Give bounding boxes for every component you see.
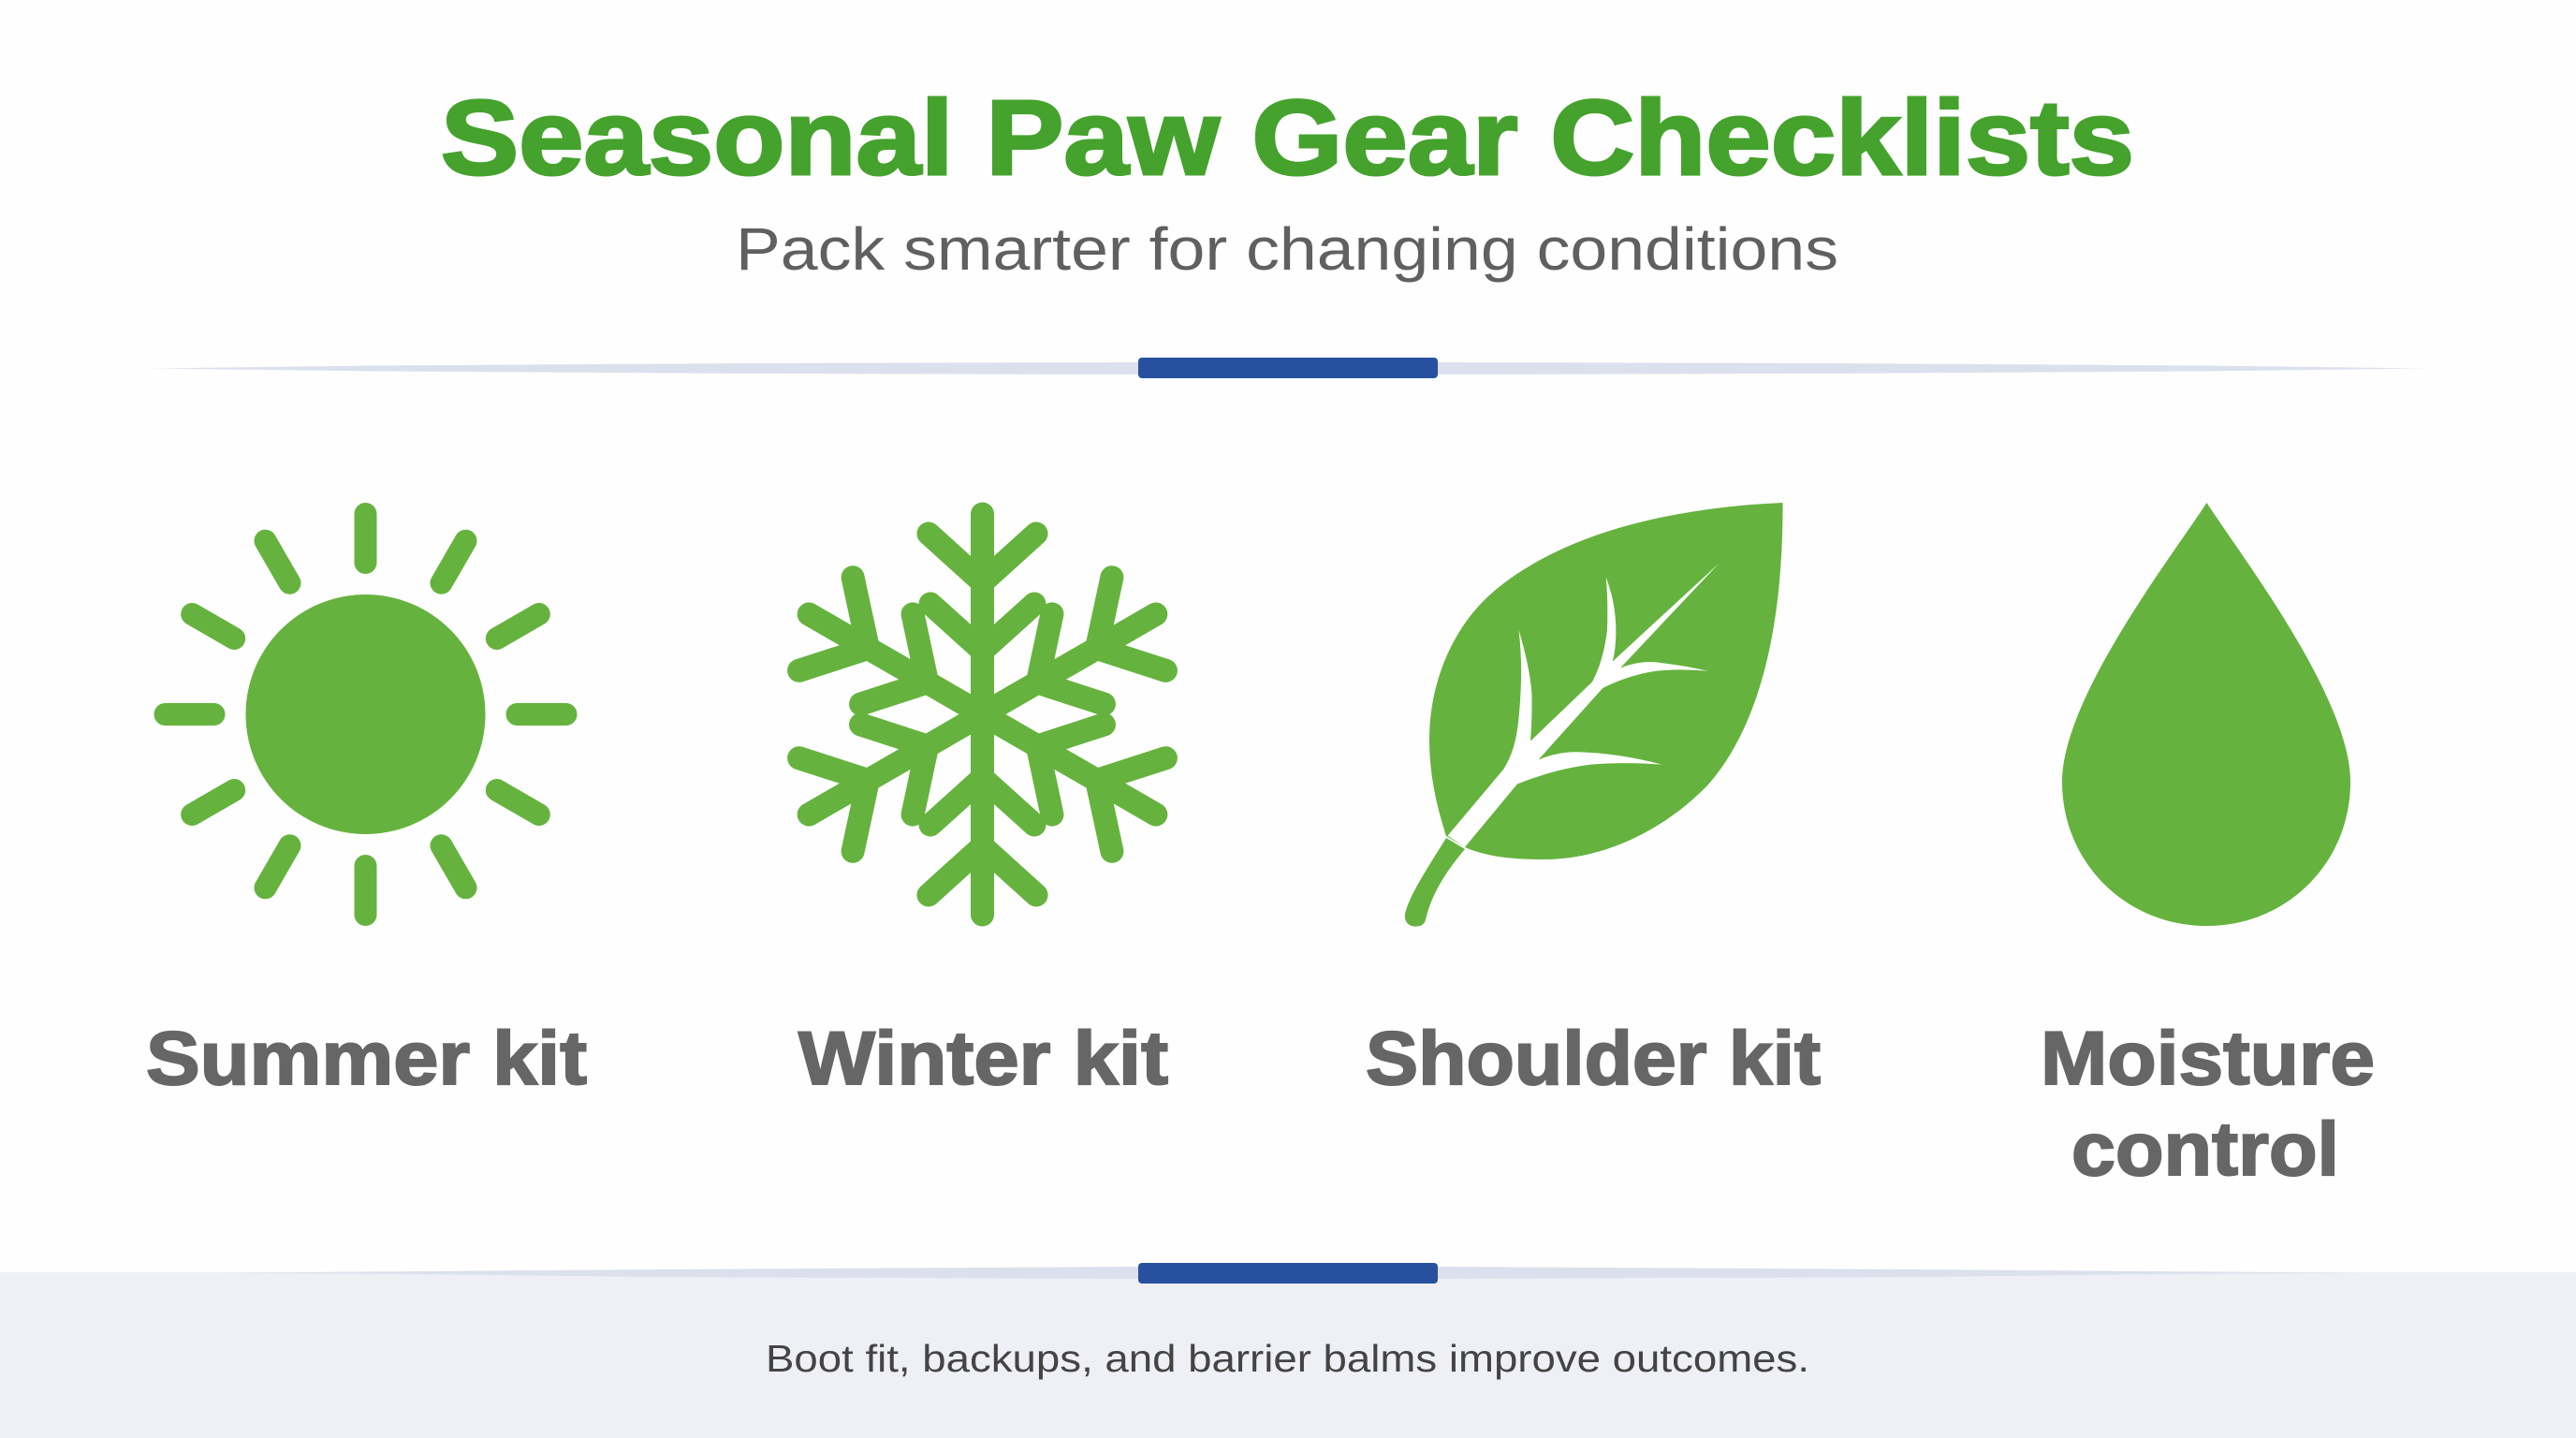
icon: snowflake [782, 514, 1183, 915]
icon: leaf [1405, 503, 1783, 927]
top divider [150, 358, 2426, 378]
label: summer kit: Summer kit [146, 1017, 587, 1101]
label: moisture control: Moisture [2041, 1017, 2375, 1101]
label: winter kit: Winter kit [798, 1017, 1168, 1101]
subtitle: Pack smarter for changing conditions [736, 215, 1838, 283]
icon: sun [165, 514, 565, 915]
title: Seasonal Paw Gear Checklists [441, 79, 2134, 197]
icon: water drop [2062, 503, 2350, 926]
footer band [0, 1272, 2576, 1438]
label: moisture control: control [2071, 1108, 2339, 1192]
label: moisture control [2041, 1017, 2375, 1192]
footer note: Boot fit, backups, and barrier balms improve outcomes. [766, 1337, 1809, 1380]
bottom divider [215, 1263, 2361, 1284]
label: shoulder kit: Shoulder kit [1366, 1017, 1821, 1101]
